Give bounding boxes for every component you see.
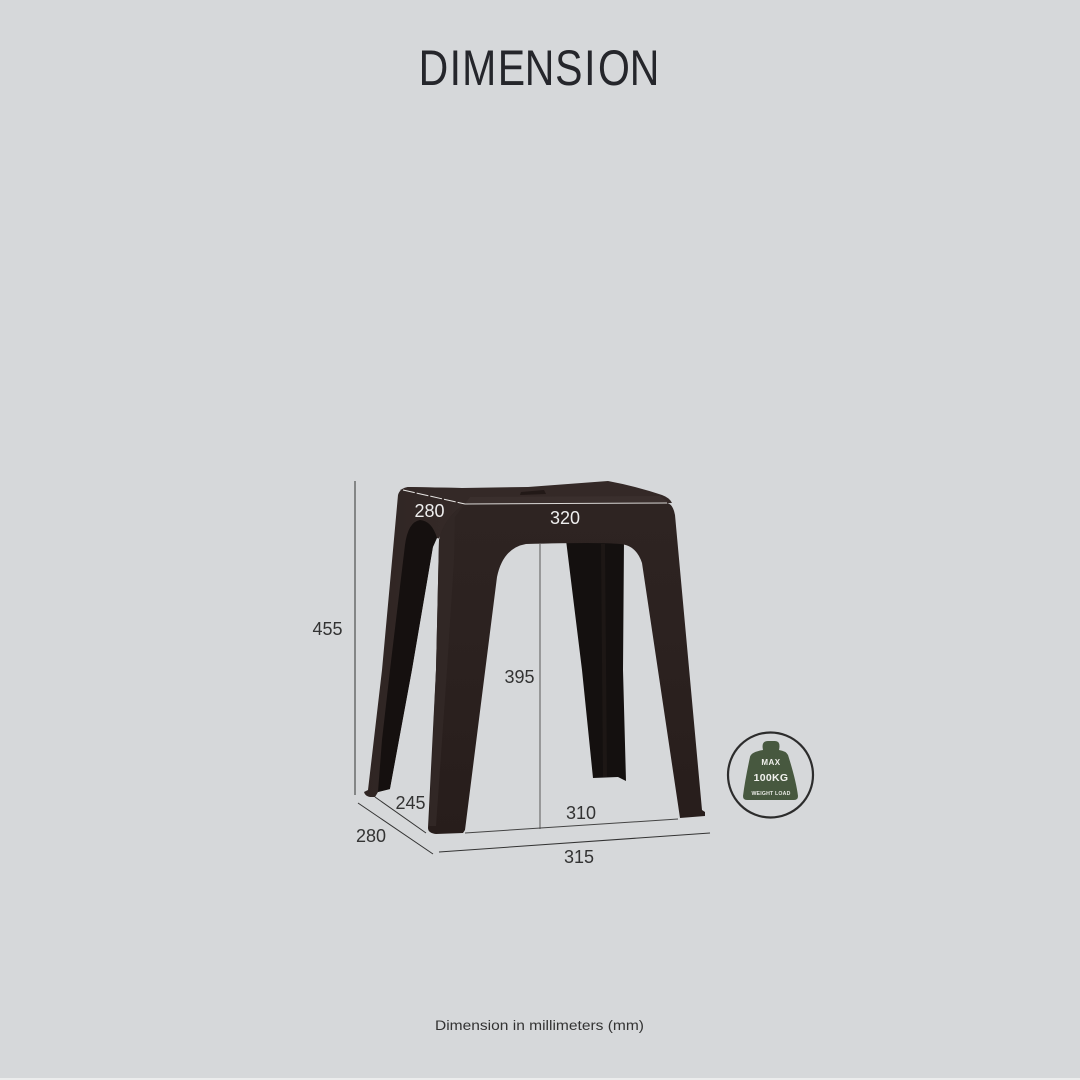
seat front ridge: [465, 496, 668, 504]
weight load text: WEIGHT LOAD: [751, 791, 791, 797]
icon: green weight: [743, 741, 798, 800]
stool illustration: [364, 481, 705, 834]
dimension line: seat height 395: [539, 544, 541, 829]
label 280 base: 280: [356, 826, 386, 846]
back left leg and side frame: [364, 487, 466, 797]
label 315: 315: [564, 847, 594, 867]
MAX text: MAX: [761, 758, 781, 767]
front corner bevel: [429, 504, 465, 826]
back right leg: [566, 540, 626, 781]
title: DIMENSION: [419, 40, 659, 96]
side opening, dark inside of back leg: [378, 520, 437, 792]
dimension line: 310: [465, 819, 678, 833]
dimension line: 280 base: [358, 803, 433, 854]
front frame with legs: [428, 503, 705, 834]
seat recess: [520, 490, 546, 495]
label 455: 455: [312, 619, 343, 639]
label 280 seat: 280: [414, 501, 445, 521]
seat edge highlight: front: [465, 503, 667, 504]
label 395: 395: [504, 667, 535, 687]
back right leg ridge: [601, 544, 607, 777]
seat top: [400, 481, 672, 506]
label 245: 245: [395, 793, 426, 813]
dimension line: 315: [439, 833, 710, 852]
footnote: Dimension in millimeters (mm): [435, 1018, 644, 1033]
side gap: [390, 538, 443, 790]
label 320 seat: 320: [550, 508, 580, 528]
badge ring: [728, 732, 813, 818]
dimension line: overall height 455: [354, 481, 356, 795]
dimension line: 245: [375, 797, 426, 833]
weight load badge: [728, 732, 813, 818]
100KG text: 100KG: [754, 772, 788, 784]
seat edge highlight: side: [403, 490, 465, 504]
label 310: 310: [566, 803, 596, 823]
